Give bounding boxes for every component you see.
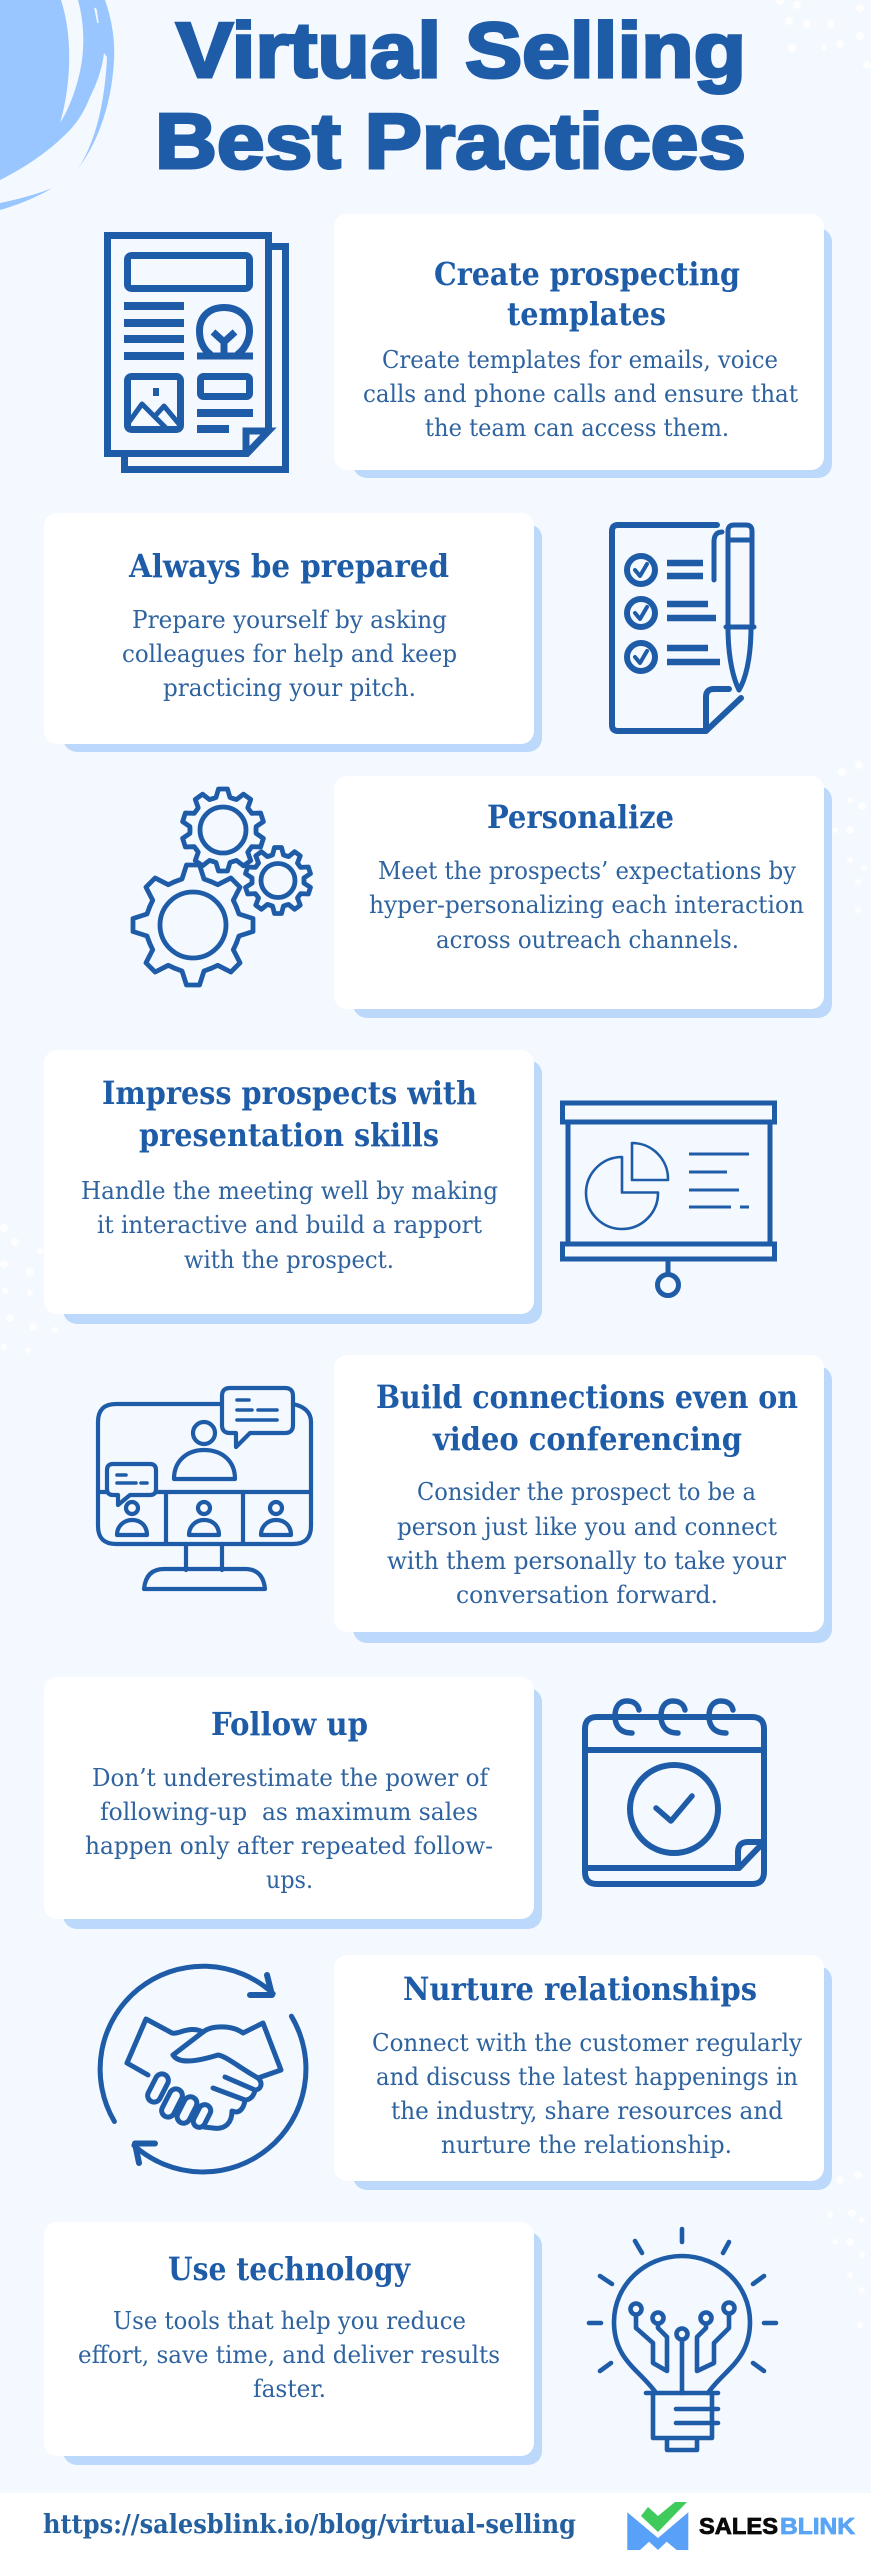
text: use technology description: Use tools that help you reduce [113, 2307, 466, 2335]
icon: handshake with cycle arrows [100, 1966, 306, 2172]
text: impress prospects description: it interactive and build a rapport [97, 1211, 482, 1239]
text: always be prepared description: practicing your pitch. [163, 674, 416, 702]
panel: build connections on video conferencing [334, 1355, 832, 1643]
panel: create prospecting templates [334, 214, 832, 478]
text: create prospecting templates description: Create templates for emails, voice [382, 346, 778, 374]
text: nurture relationships description: Connect with the customer regularly [372, 2029, 803, 2057]
text: follow up description: following-up as maximum sales [100, 1798, 478, 1826]
heading: build connections: Build connections even on [376, 1379, 798, 1416]
text: follow up description: ups. [266, 1866, 313, 1894]
heading: nurture relationships: Nurture relationships [403, 1971, 757, 2008]
title: Best Practices [155, 97, 746, 185]
icon: calendar with check [585, 1701, 764, 1884]
text: impress prospects description [81, 1177, 498, 1274]
text: create prospecting templates description [363, 346, 798, 442]
heading: create prospecting templates: Create prospecting [434, 256, 740, 293]
text: always be prepared description: Prepare yourself by asking [132, 606, 447, 634]
heading: follow up: Follow up [211, 1706, 368, 1743]
text: use technology description: faster. [253, 2375, 326, 2403]
heading: use technology: Use technology [168, 2251, 412, 2288]
heading: build connections [376, 1379, 798, 1458]
footer url: https://salesblink.io/blog/virtual-selling [43, 2510, 576, 2540]
text: always be prepared description [122, 606, 457, 702]
heading: create prospecting templates [434, 256, 740, 333]
panel: always be prepared [44, 513, 542, 752]
text: use technology description [78, 2307, 500, 2403]
text: nurture relationships description: and discuss the latest happenings in [376, 2063, 798, 2091]
text: personalize description: Meet the prospects’ expectations by [378, 857, 797, 885]
panel: impress prospects with presentation skills [44, 1050, 542, 1324]
heading: build connections: video conferencing [432, 1421, 742, 1458]
text: follow up description: Don’t underestimate the power of [92, 1764, 490, 1792]
text: use technology description: effort, save time, and deliver results [78, 2341, 500, 2369]
heading: personalize: Personalize [487, 799, 674, 836]
heading: create prospecting templates: templates [507, 296, 666, 333]
heading: impress prospects: Impress prospects with [102, 1075, 477, 1112]
text: create prospecting templates description: the team can access them. [425, 414, 729, 442]
panel: follow up [44, 1677, 542, 1929]
title: Virtual Selling [176, 6, 746, 94]
text: build connections description: Consider the prospect to be a [417, 1478, 756, 1506]
text: build connections description: conversation forward. [456, 1581, 718, 1609]
logo: salesblink: SALES [699, 2513, 778, 2539]
text: impress prospects description: Handle the meeting well by making [81, 1177, 498, 1205]
text: impress prospects description: with the prospect. [184, 1246, 394, 1274]
icon: presentation screen [562, 1103, 774, 1296]
panel: use technology [44, 2222, 542, 2465]
icon: light bulb with circuit [589, 2229, 776, 2450]
text: personalize description: hyper-personalizing each interaction [369, 891, 804, 919]
text: build connections description [387, 1478, 787, 1609]
heading: always be prepared: Always be prepared [128, 548, 449, 585]
text: nurture relationships description: the industry, share resources and [391, 2097, 783, 2125]
panel: nurture relationships [334, 1955, 832, 2190]
logo: salesblink [627, 2502, 855, 2550]
footer bar [0, 2493, 871, 2560]
icon: gears [133, 789, 312, 985]
text: build connections description: with them personally to take your [387, 1547, 787, 1575]
text: follow up description [85, 1764, 493, 1894]
heading: impress prospects: presentation skills [139, 1117, 439, 1154]
logo: salesblink: BLINK [780, 2513, 855, 2539]
heading: impress prospects [102, 1075, 477, 1154]
text: build connections description: person just like you and connect [397, 1513, 777, 1541]
decorative brush circle [0, 0, 114, 210]
text: personalize description: across outreach channels. [436, 926, 739, 954]
title [155, 6, 746, 185]
icon: document template [108, 236, 286, 470]
text: follow up description: happen only after repeated follow- [85, 1832, 493, 1860]
text: create prospecting templates description: calls and phone calls and ensure that [363, 380, 798, 408]
icon: checklist and pen [612, 525, 754, 731]
text: nurture relationships description: nurture the relationship. [441, 2131, 732, 2159]
panel: personalize [334, 776, 832, 1018]
icon: video conference monitor [98, 1388, 311, 1589]
text: personalize description [369, 857, 804, 954]
text: always be prepared description: colleagues for help and keep [122, 640, 457, 668]
text: nurture relationships description [372, 2029, 803, 2159]
